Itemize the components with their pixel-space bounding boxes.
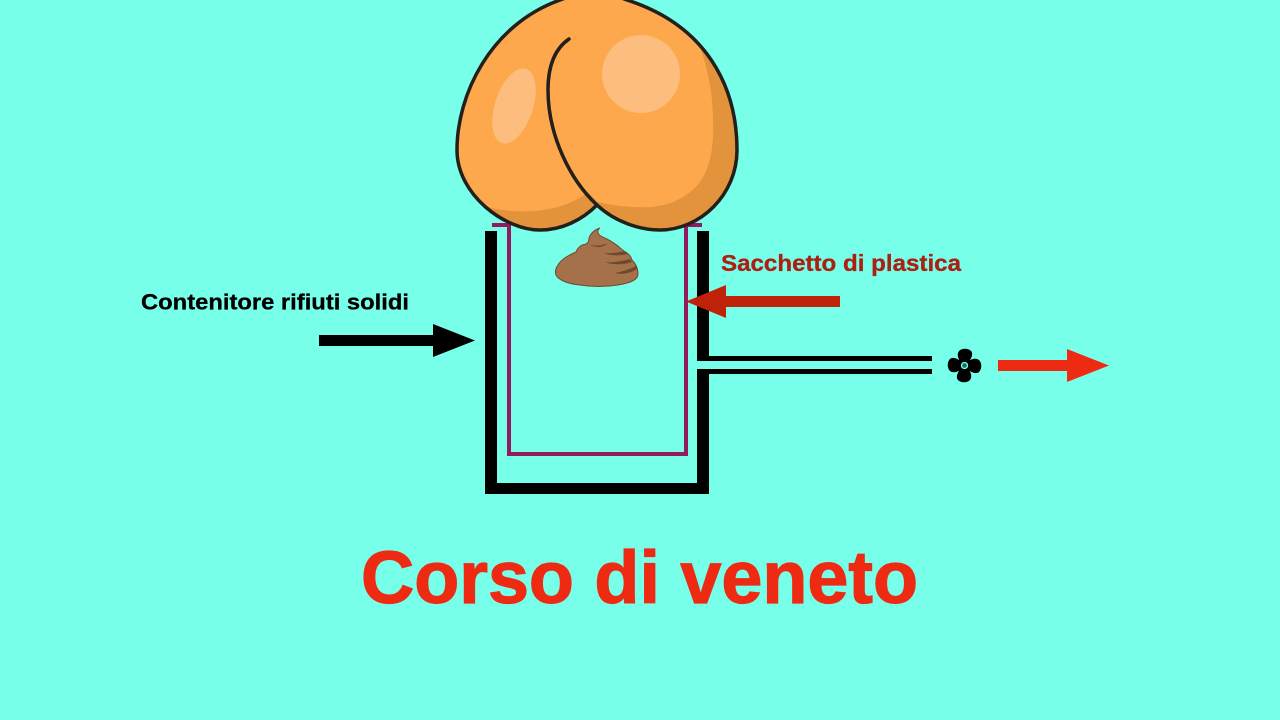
arrow: container (319, 324, 475, 357)
icon: buttocks (457, 0, 750, 240)
plastic bag (492, 223, 702, 456)
label: plastic bag: Sacchetto di plastica (721, 250, 961, 276)
solid waste container (485, 231, 709, 494)
title: Corso di veneto (361, 536, 918, 619)
icon: fan (948, 349, 981, 382)
icon: poop (555, 228, 638, 286)
label: solid waste container: Contenitore rifiuti solidi (141, 290, 409, 314)
arrow: plastic bag (686, 285, 840, 318)
arrow: exhaust (998, 349, 1109, 382)
exhaust pipe (697, 356, 932, 374)
